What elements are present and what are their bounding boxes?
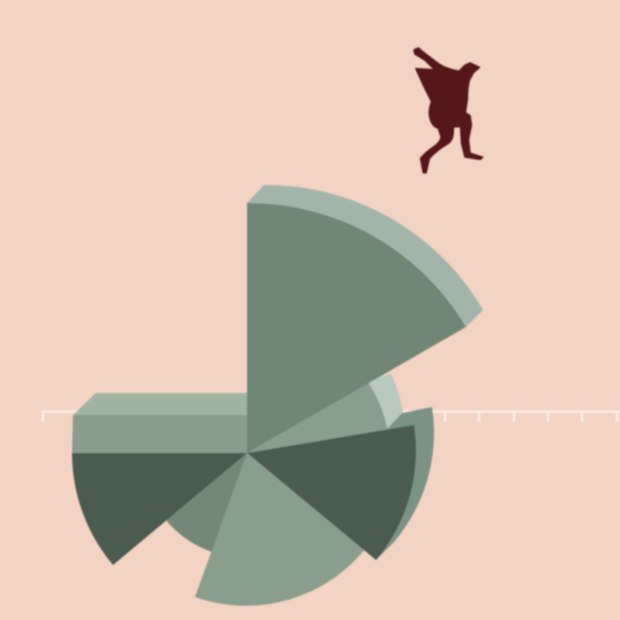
sector: lower left small (165, 453, 247, 552)
sector: lower left dark (72, 453, 247, 565)
axis with tick marks (43, 411, 620, 422)
sector: right dark (247, 425, 416, 560)
icon: leaping figure silhouette (414, 48, 483, 173)
sector: top main (247, 203, 466, 453)
sector: left block top face (73, 393, 250, 415)
sector: bottom light (195, 453, 365, 606)
sector: left block front face (72, 415, 250, 453)
sector: top extrusion face (247, 185, 483, 327)
sector: upper right small (247, 382, 388, 453)
sector: upper right extrusion (365, 374, 403, 432)
sector: right extrusion (300, 407, 434, 560)
